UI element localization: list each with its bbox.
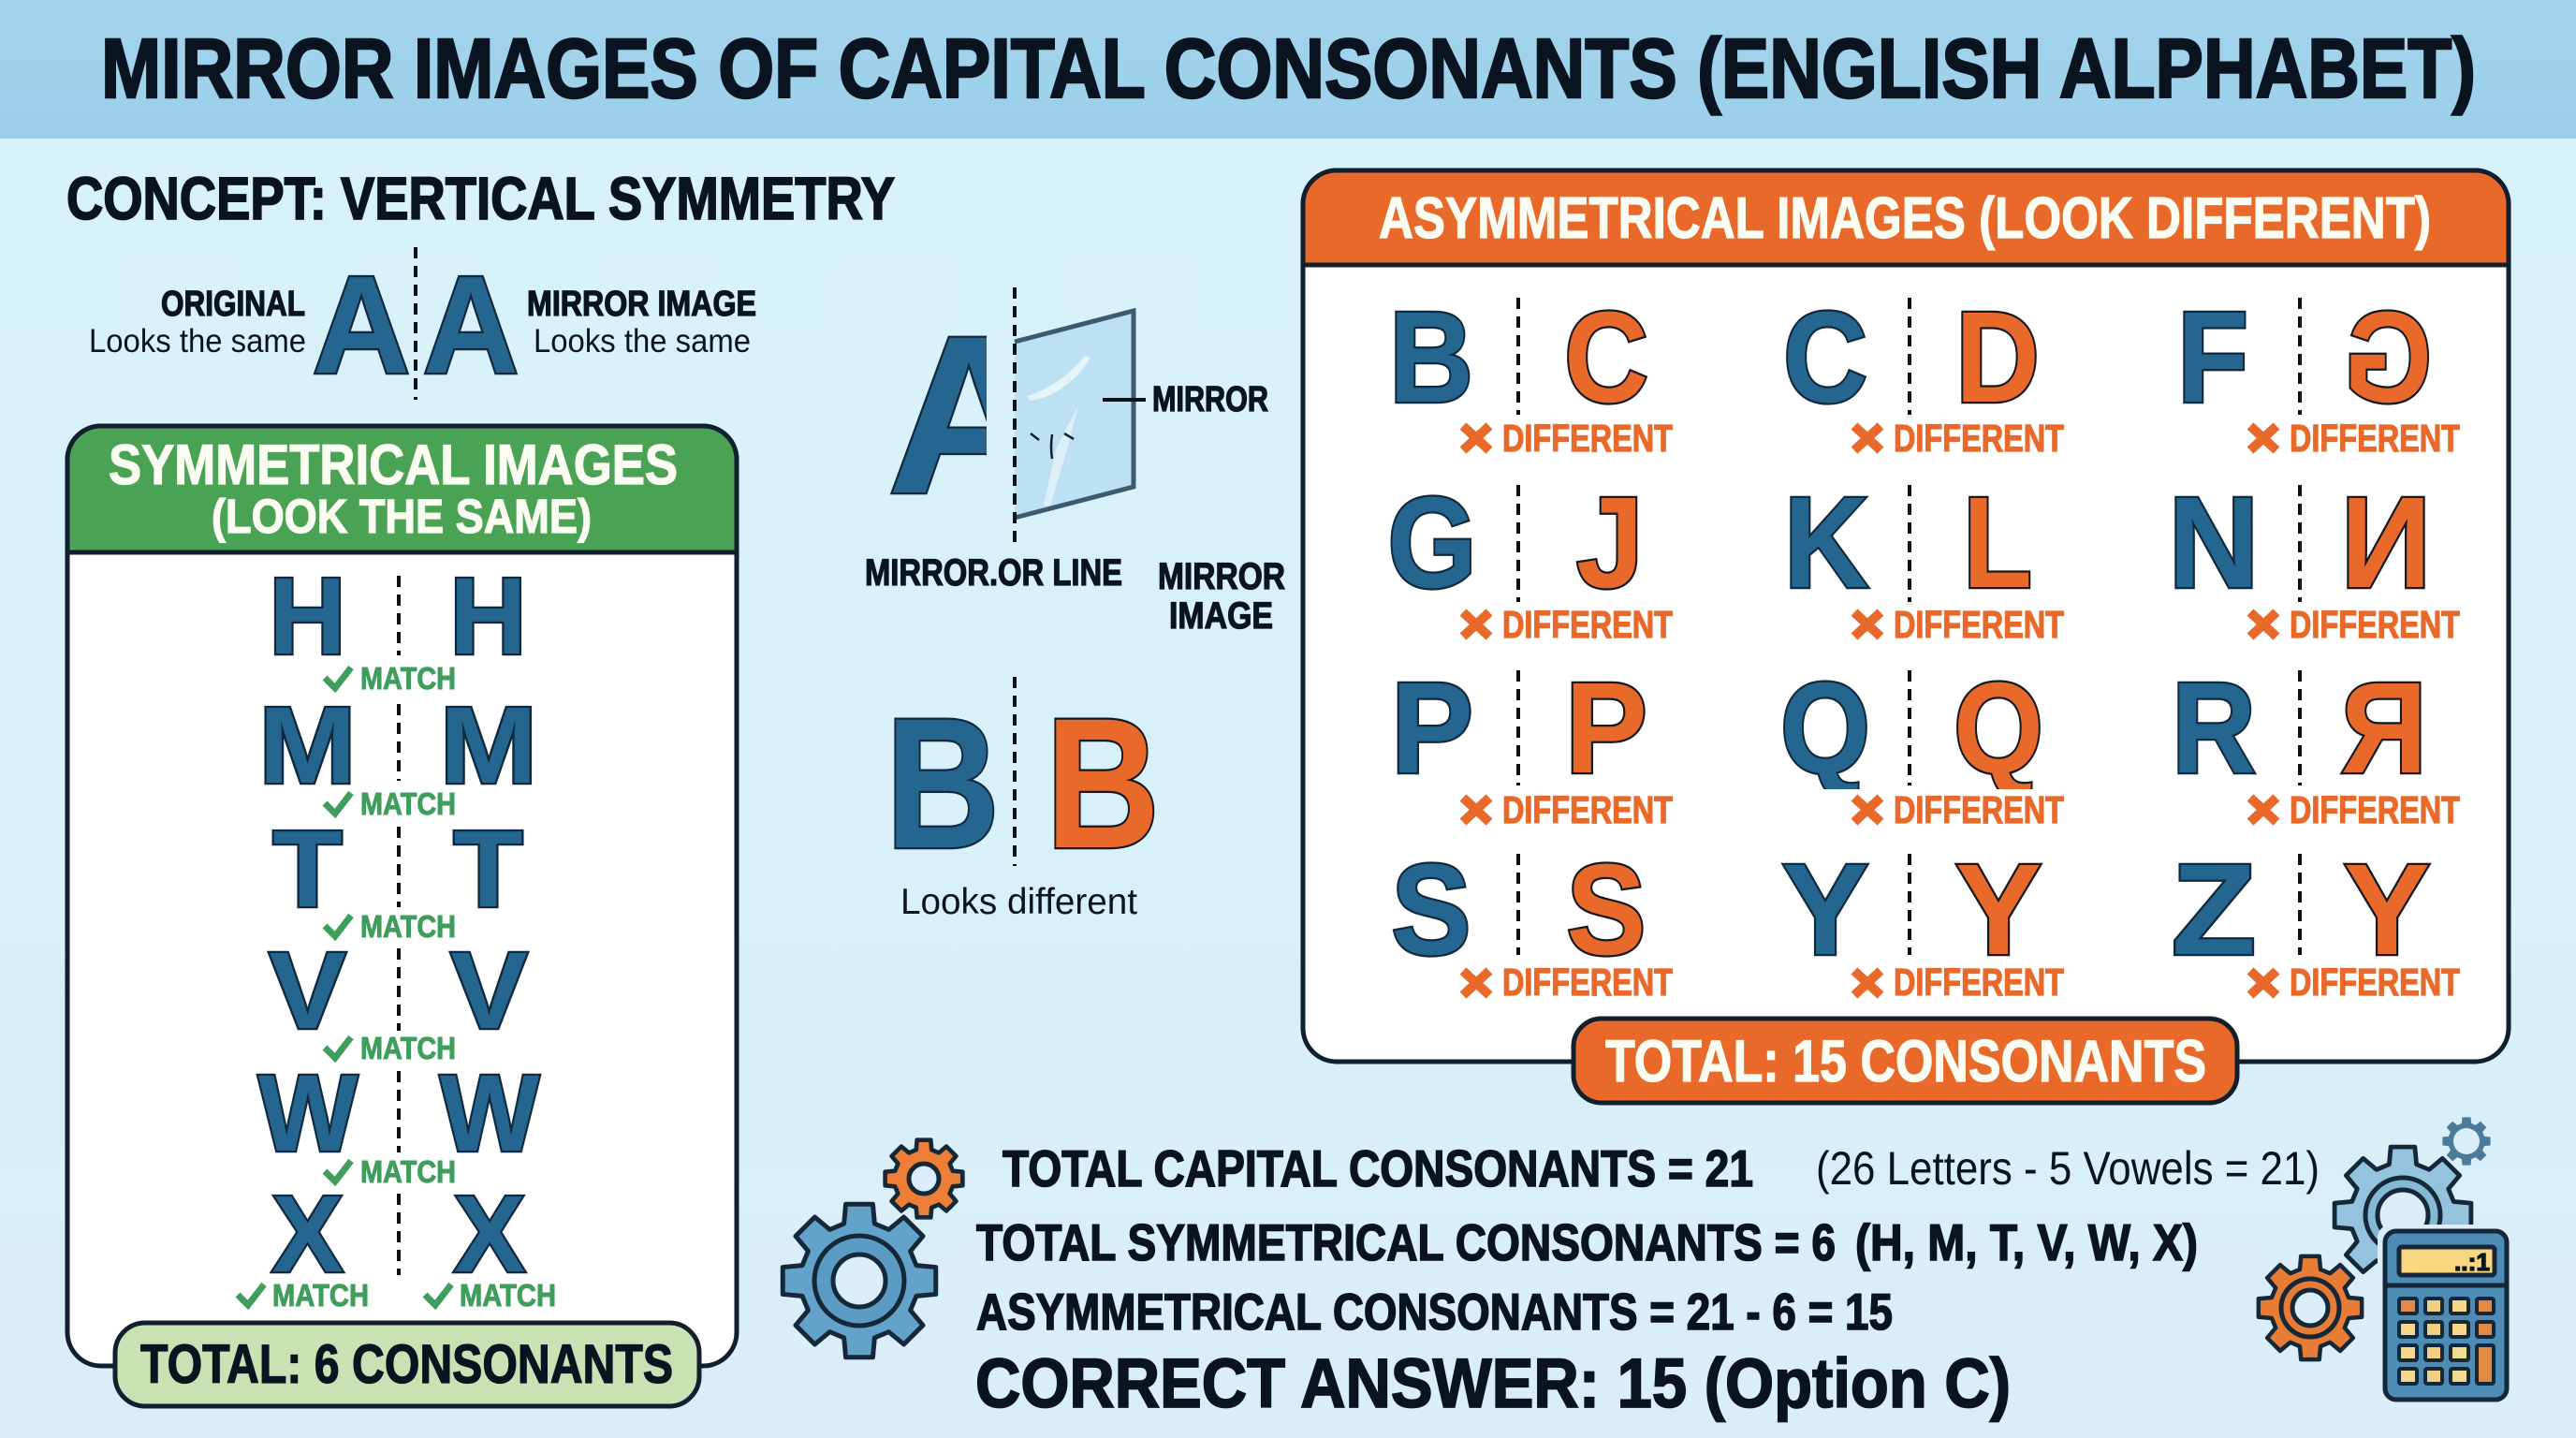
pair Y Y	[1782, 838, 2064, 1004]
row H: MATCH	[360, 661, 456, 696]
pair S S: S	[1391, 838, 1471, 982]
looks different example: B B: B	[886, 680, 1000, 887]
pair Q Q: Q	[1780, 656, 1870, 800]
pair F reversed G: G	[2344, 286, 2432, 430]
pair Y Y: Y	[1782, 838, 1868, 982]
total pill: 6 consonants	[115, 1323, 699, 1406]
row T	[273, 808, 522, 944]
pair Q Q	[1783, 670, 2065, 826]
row W: W	[258, 1052, 358, 1174]
summary text block: TOTAL SYMMETRICAL CONSONANTS = 6	[976, 1213, 1836, 1271]
row W: MATCH	[360, 1154, 456, 1189]
row M	[258, 684, 537, 821]
looks different example: B B: B	[1046, 680, 1160, 887]
pair R reversed R: R	[2172, 656, 2256, 800]
mirror illustration: MIRROR	[1158, 556, 1285, 597]
pair Z Y: DIFFERENT	[2290, 961, 2460, 1004]
row V	[270, 930, 528, 1065]
row H: H	[270, 555, 346, 677]
row T: MATCH	[360, 909, 456, 944]
pair R reversed R: DIFFERENT	[2290, 788, 2460, 831]
concept diagram: letter A and its mirror: Looks the same	[89, 323, 306, 360]
row X: MATCH	[272, 1278, 369, 1313]
pair N reversed N: DIFFERENT	[2290, 603, 2460, 646]
mirror illustration: A	[887, 289, 1050, 540]
pair Y Y: Y	[1955, 838, 2042, 982]
title banner	[0, 0, 2576, 139]
pair B C	[1389, 286, 1673, 460]
pair Q Q: Q	[1954, 656, 2043, 800]
heading: concept vertical symmetry: CONCEPT: VERTICAL SYMMETRY	[66, 165, 895, 232]
icon: calculator	[2385, 1231, 2507, 1400]
pair B C: C	[1564, 286, 1648, 430]
pair G J: G	[1387, 471, 1477, 615]
icon: blue and orange gears	[783, 1140, 962, 1357]
summary text block: ASYMMETRICAL CONSONANTS = 21 - 6 = 15	[976, 1283, 1893, 1341]
pair Z Y: Z	[2172, 838, 2256, 982]
row T: T	[273, 808, 343, 930]
row T: T	[453, 808, 522, 930]
summary text block: TOTAL CAPITAL CONSONANTS = 21	[1003, 1139, 1753, 1197]
pair Q Q: DIFFERENT	[1894, 788, 2064, 831]
pair C D: C	[1783, 286, 1867, 430]
row M: MATCH	[360, 786, 456, 821]
icon: calculator: ..:1	[2454, 1248, 2490, 1276]
pair C D: DIFFERENT	[1894, 417, 2064, 460]
pair Z Y	[2172, 838, 2460, 1004]
pair Y Y: DIFFERENT	[1894, 961, 2064, 1004]
icon: glass mirror	[1015, 311, 1134, 518]
pair N reversed N: N	[2168, 471, 2260, 615]
mirror illustration: IMAGE	[1169, 595, 1273, 637]
row X: X	[454, 1173, 525, 1295]
row M: M	[258, 684, 356, 806]
panel header: symmetrical	[67, 426, 737, 552]
looks different example: B B: Looks different	[900, 882, 1137, 922]
pair S S: DIFFERENT	[1502, 961, 1673, 1004]
pair F reversed G: F	[2177, 286, 2248, 430]
total pill: 15 consonants: TOTAL: 15 CONSONANTS	[1605, 1029, 2206, 1094]
pair S S: S	[1567, 838, 1646, 982]
mirror illustration: MIRROR.OR LINE	[865, 552, 1122, 594]
total pill: 15 consonants	[1573, 1019, 2237, 1103]
icon: gears and calculator	[2259, 1117, 2514, 1406]
pair K L: K	[1784, 471, 1868, 615]
mirror illustration	[865, 287, 1285, 637]
pair B C: DIFFERENT	[1502, 417, 1673, 460]
panel: asymmetrical images	[1303, 170, 2509, 1103]
pair N reversed N	[2168, 471, 2460, 646]
pair Z Y: Y	[2344, 838, 2430, 982]
pair F reversed G: DIFFERENT	[2290, 417, 2460, 460]
pair G J	[1387, 471, 1673, 646]
pair K L: DIFFERENT	[1894, 603, 2064, 646]
pair R reversed R	[2172, 656, 2460, 831]
row V: V	[451, 930, 528, 1051]
concept diagram: letter A and its mirror: MIRROR IMAGE	[527, 285, 756, 324]
pair P P	[1391, 656, 1673, 831]
concept diagram: letter A and its mirror	[89, 247, 756, 403]
concept diagram: letter A and its mirror: ORIGINAL	[161, 285, 305, 324]
panel header: symmetrical: SYMMETRICAL IMAGES	[109, 433, 678, 496]
looks different example: B B	[886, 677, 1160, 922]
pair C D: D	[1955, 286, 2040, 430]
pair G J: DIFFERENT	[1502, 603, 1673, 646]
pair K L: L	[1963, 471, 2032, 615]
concept diagram: letter A and its mirror: Looks the same	[534, 323, 751, 360]
pair N reversed N: И	[2340, 471, 2432, 615]
pair P P: P	[1391, 656, 1473, 800]
pair C D	[1783, 286, 2064, 460]
pair P P: P	[1565, 656, 1647, 800]
mirror illustration: MIRROR	[1152, 380, 1268, 419]
panel header: asymmetrical	[1303, 170, 2509, 265]
row V: V	[270, 930, 346, 1051]
row X: MATCH	[460, 1278, 556, 1313]
pair G J: J	[1576, 471, 1644, 615]
panel header: symmetrical: (LOOK THE SAME)	[212, 490, 592, 543]
row W	[258, 1052, 539, 1189]
row W: W	[440, 1052, 539, 1174]
summary text block: (26 Letters - 5 Vowels = 21)	[1816, 1142, 2320, 1195]
pair S S	[1391, 838, 1673, 1004]
row X: X	[271, 1173, 343, 1295]
concept diagram: letter A and its mirror: A	[423, 248, 519, 403]
pair B C: B	[1389, 286, 1473, 430]
pair P P: DIFFERENT	[1502, 788, 1673, 831]
pair K L	[1784, 471, 2064, 646]
pair F reversed G	[2177, 286, 2460, 460]
summary text block	[975, 1139, 2320, 1422]
row H: H	[449, 555, 526, 677]
summary text block: (H, M, T, V, W, X)	[1855, 1213, 2198, 1271]
panel: symmetrical images	[67, 426, 737, 1406]
row V: MATCH	[360, 1031, 456, 1065]
row X	[238, 1173, 556, 1313]
row H	[270, 555, 526, 696]
summary text block: CORRECT ANSWER: 15 (Option C)	[975, 1344, 2011, 1422]
pair R reversed R: Я	[2341, 656, 2427, 800]
concept diagram: letter A and its mirror: A	[313, 248, 410, 403]
total pill: 6 consonants: TOTAL: 6 CONSONANTS	[140, 1334, 673, 1395]
row M: M	[440, 684, 537, 806]
